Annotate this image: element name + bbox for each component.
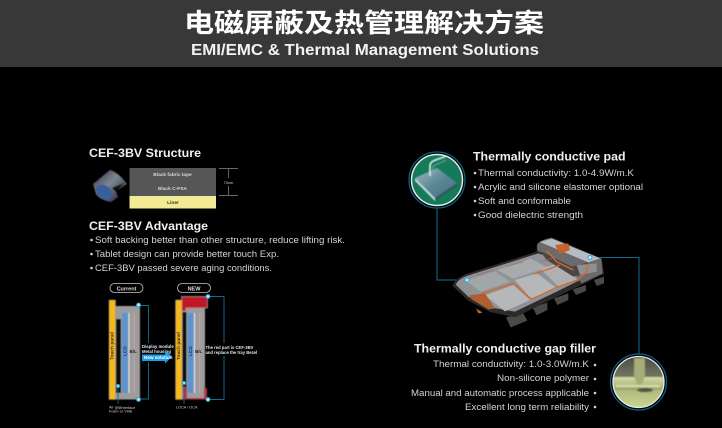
heading: CEF-3BV Advantage: CEF-3BV Advantage: [89, 219, 208, 233]
connector bracket: [118, 306, 148, 404]
label: air gap: Air gap: [109, 406, 121, 410]
raised module: [537, 238, 603, 283]
label: air gap: [109, 406, 135, 414]
label: red part note: [206, 345, 257, 355]
text: thermally conductive gap filler: [411, 342, 596, 412]
marker dot: right: [588, 256, 592, 260]
icon: thermally conductive pad: [409, 152, 465, 208]
cells: front row: [485, 285, 530, 311]
feet: [506, 277, 604, 327]
battery pack illustration: [453, 237, 604, 327]
layer label: liner: Liner: [167, 200, 179, 206]
advantage list: Soft backing better than other structure, reduce lifting risk.: [95, 235, 345, 245]
marker dot: left: [465, 278, 469, 282]
feature list: Thermal conductivity: 1.0-3.0W/m.K: [433, 359, 589, 369]
header band: [0, 0, 722, 67]
feature list: [474, 168, 643, 220]
feature list: Acrylic and silicone elastomer optional: [478, 182, 643, 192]
label: display module metal housing: [142, 344, 174, 354]
orange bus bars: [482, 251, 588, 299]
dimension marker: 70cm: [219, 168, 238, 196]
advantage list: Tablet design can provide better touch Exp.: [95, 249, 279, 259]
label: air gap: Foam or VHB: [109, 410, 132, 414]
pill: Current: Current: [117, 286, 137, 292]
icon: gap filler dispensing: [610, 354, 666, 410]
top deck: [456, 253, 597, 312]
label: display module metal housing: Metal housing: [142, 349, 171, 354]
label: BL: B/L: [195, 349, 202, 354]
feature list: Thermal conductivity: 1.0-4.9W/m.K: [478, 168, 634, 178]
diagram: new structure: [176, 284, 257, 410]
label: LCD: LCD: [188, 346, 194, 356]
diagram: current structure: [109, 284, 148, 414]
advantage list: [90, 235, 345, 273]
arrow: new solution: [142, 350, 173, 364]
feature list: Excellent long term reliability: [465, 402, 590, 412]
label: touch panel: Touch panel: [110, 332, 116, 360]
feature list: [411, 359, 596, 412]
connector bracket: [184, 296, 224, 404]
feature list: Soft and conformable: [478, 196, 571, 206]
icon: tape roll: [93, 170, 127, 202]
label: LOCA: LOCA / OCA: [176, 406, 198, 410]
label: BL: B/L: [130, 349, 137, 354]
connector line: pad circle to battery: [437, 208, 467, 280]
dimension marker: 70cm: 70cm: [224, 180, 234, 185]
label: air gap: Interface: [120, 406, 135, 410]
feature list: Manual and automatic process applicable: [411, 388, 589, 398]
layer label: C-PSA: Black C-PSA: [158, 186, 188, 192]
tray: [453, 237, 604, 317]
title: English: EMI/EMC & Thermal Management Solutions: [191, 42, 539, 59]
feature list: Good dielectric strength: [478, 210, 583, 220]
label: red part note: The red part is CEF-3BV: [206, 345, 254, 350]
advantage list: CEF-3BV passed severe aging conditions.: [95, 263, 272, 273]
label: red part note: and replace the tray Bezel: [206, 350, 257, 355]
label: display module metal housing: Display module: [142, 344, 174, 349]
heading: Thermally conductive pad: [473, 150, 626, 164]
title: Chinese: 电磁屏蔽及热管理解决方案: [184, 8, 544, 38]
connector line: battery to gap filler circle: [590, 258, 639, 354]
cells: back row: [466, 271, 510, 292]
feature list: Non-silicone polymer: [497, 373, 589, 383]
text: thermally conductive pad: [473, 150, 643, 220]
pill: NEW: NEW: [188, 286, 201, 292]
heading: Thermally conductive gap filler: [414, 342, 596, 356]
heading: CEF-3BV Structure: CEF-3BV Structure: [89, 146, 201, 160]
label: LCD: LCD: [122, 346, 128, 356]
label: touch panel: Touch panel: [176, 332, 182, 360]
layer structure diagram: [130, 168, 216, 208]
arrow: new solution: New solution: [144, 355, 173, 360]
layer label: fabric tape: Black fabric tape: [153, 172, 192, 178]
